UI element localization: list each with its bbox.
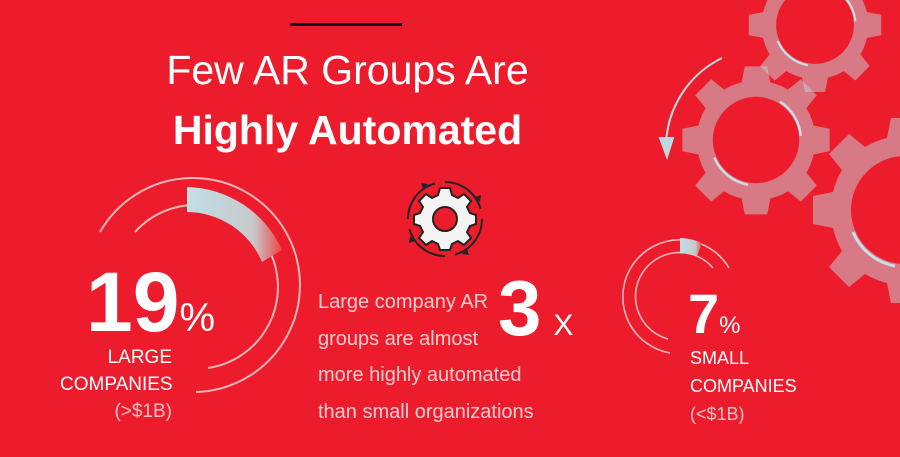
- text: COMPANIES: [60, 374, 173, 395]
- icon: gear with arrows: [408, 182, 482, 256]
- center text: Large company AR: [318, 291, 488, 313]
- gear top: [749, 0, 881, 92]
- text: SMALL: [690, 348, 749, 368]
- title line: [290, 23, 402, 26]
- text: (>$1B): [114, 401, 172, 422]
- title: Highly Automated: [173, 107, 522, 153]
- stat: 19% large companies: 19%: [86, 255, 215, 349]
- donut small: [623, 240, 729, 353]
- center text: groups are almost: [318, 328, 478, 350]
- title: [166, 47, 529, 153]
- center text: more highly automated: [318, 364, 521, 386]
- center text: than small organizations: [318, 400, 534, 422]
- gear bottom right: [813, 118, 900, 303]
- donut large: [100, 178, 300, 392]
- text: (<$1B): [690, 404, 745, 424]
- text: COMPANIES: [690, 376, 797, 396]
- stat: 3x: 3 X: [498, 264, 573, 352]
- gear middle: [682, 66, 830, 214]
- stat: 7% small companies: 7%: [688, 282, 740, 345]
- arrow arc: [660, 58, 722, 157]
- text: LARGE: [108, 347, 172, 368]
- title: Few AR Groups Are: [166, 47, 529, 93]
- center text: [318, 291, 534, 422]
